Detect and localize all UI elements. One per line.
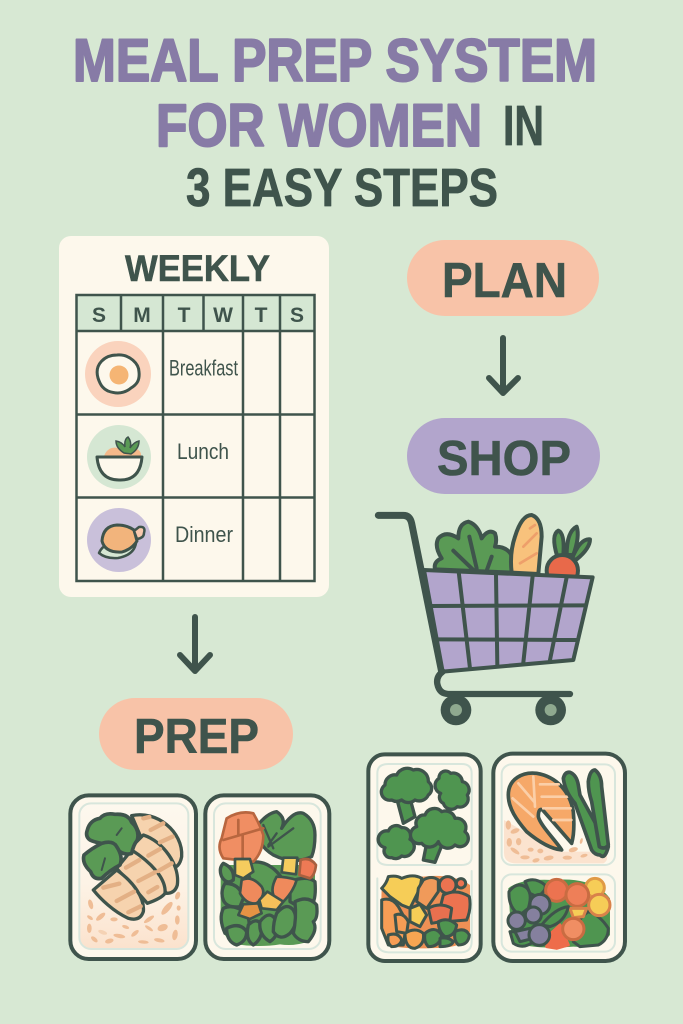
mixed fruit and greens <box>508 878 610 948</box>
salmon steak <box>508 773 574 850</box>
calendar header row: T <box>255 304 268 327</box>
container: broccoli and roasted vegetables <box>368 754 481 961</box>
spinach leaves <box>220 812 317 946</box>
icon: roast chicken <box>87 508 151 572</box>
cart frame <box>378 515 442 672</box>
title line 2: FOR WOMEN <box>156 92 482 159</box>
rice bed <box>504 820 607 863</box>
arrow: calendar to prep <box>180 617 210 671</box>
step: shop pill <box>407 418 600 494</box>
step: shop pill: SHOP <box>437 432 571 486</box>
icon: shopping cart <box>378 515 593 725</box>
calendar header row <box>76 295 314 331</box>
container: salmon and asparagus <box>493 754 625 961</box>
step: prep pill <box>99 698 293 770</box>
baguette <box>511 515 542 574</box>
roasted vegetable medley <box>381 876 470 948</box>
title <box>73 27 597 218</box>
cart base <box>437 672 570 694</box>
grilled chicken slices <box>93 815 182 919</box>
lettuce garnish <box>84 814 138 879</box>
icon: salad bowl <box>87 425 151 489</box>
title line 1: MEAL PREP SYSTEM <box>73 27 597 94</box>
carrot root <box>547 527 590 586</box>
calendar header row: W <box>213 304 233 327</box>
rice <box>86 891 181 944</box>
calendar header row: S <box>290 304 304 327</box>
step: prep pill: PREP <box>134 710 259 764</box>
sweet potato and pepper cubes <box>220 812 316 919</box>
asparagus spears <box>563 770 608 856</box>
container: greens and vegetables <box>205 795 329 959</box>
arrow: plan to shop <box>489 338 518 393</box>
title word: in: IN <box>503 94 544 158</box>
calendar heading: WEEKLY <box>125 248 270 289</box>
container: chicken and rice <box>70 795 196 959</box>
panel: weekly calendar <box>59 236 329 597</box>
dinner label: Dinner <box>175 522 233 547</box>
step: plan pill: PLAN <box>442 254 567 308</box>
calendar header row: M <box>133 304 151 327</box>
title line 3: 3 EASY STEPS <box>186 158 498 218</box>
step: plan pill <box>407 240 599 316</box>
calendar card <box>59 236 329 597</box>
cart basket <box>424 570 593 672</box>
broccoli florets <box>378 768 469 862</box>
lettuce <box>435 522 513 573</box>
breakfast label: Breakfast <box>169 356 238 380</box>
calendar header row: S <box>92 304 106 327</box>
lunch label: Lunch <box>177 439 229 464</box>
cart wheels <box>441 695 566 725</box>
icon: fried egg <box>85 341 151 407</box>
calendar header row: T <box>178 304 191 327</box>
